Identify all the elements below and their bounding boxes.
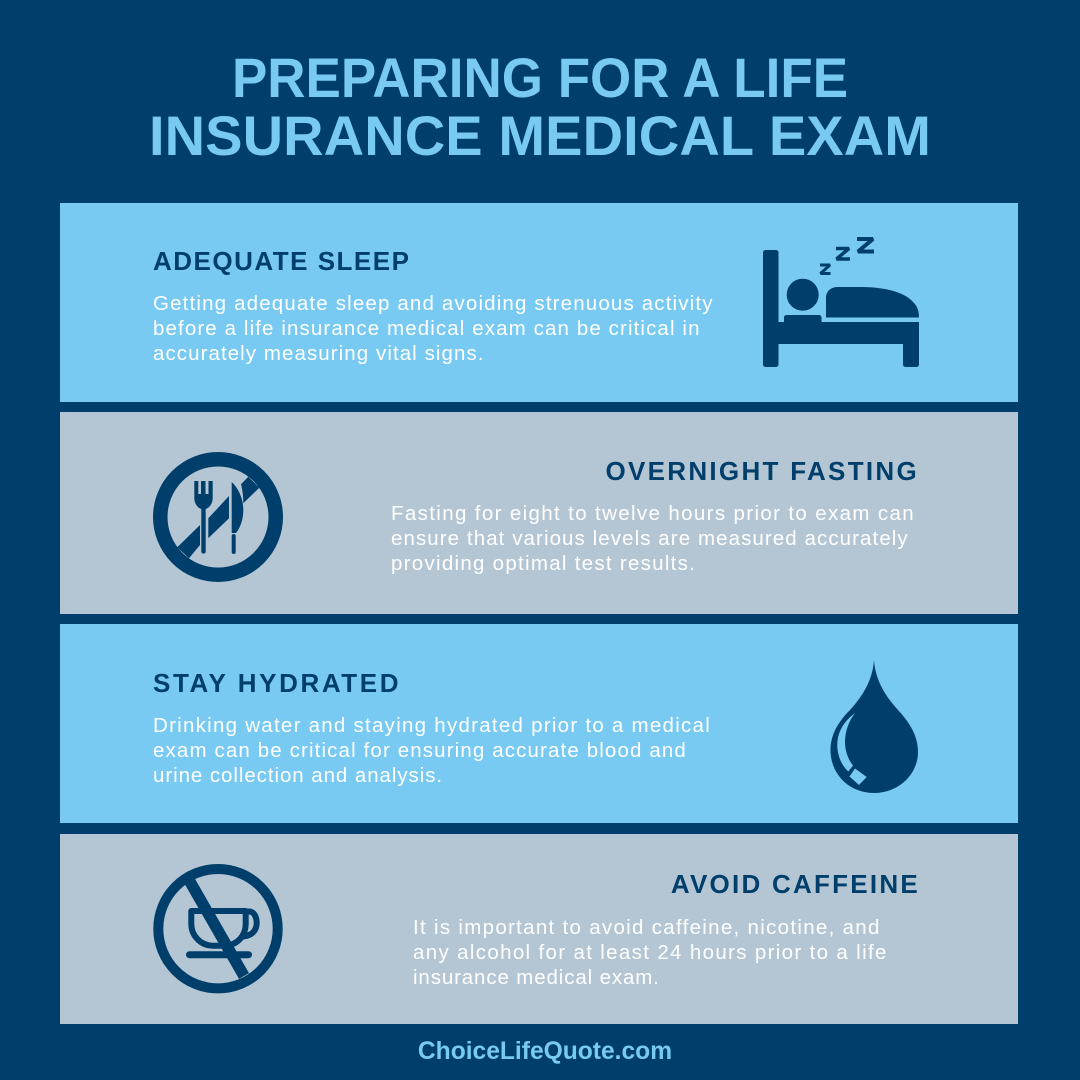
text: overnight fasting: ensure that various levels are measured accurately (391, 527, 909, 550)
heading: stay hydrated: STAY HYDRATED (153, 668, 401, 698)
text: adequate sleep: Getting adequate sleep and avoiding strenuous activity (153, 292, 714, 315)
footer website: ChoiceLifeQuote.com (418, 1038, 672, 1065)
text: adequate sleep (153, 292, 714, 365)
title (149, 46, 931, 167)
panel: adequate sleep (60, 203, 1018, 402)
text: stay hydrated (153, 714, 711, 787)
text: adequate sleep: before a life insurance medical exam can be critical in (153, 317, 701, 340)
heading: overnight fasting: OVERNIGHT FASTING (605, 456, 919, 486)
text: adequate sleep: accurately measuring vital signs. (153, 342, 485, 365)
text: stay hydrated: Drinking water and staying hydrated prior to a medical (153, 714, 711, 737)
icon: sleeping person in bed (763, 239, 919, 367)
text: overnight fasting: Fasting for eight to twelve hours prior to exam can (391, 502, 915, 525)
text: stay hydrated: exam can be critical for ensuring accurate blood and (153, 739, 687, 762)
panel: avoid caffeine (60, 834, 1018, 1024)
text: overnight fasting (391, 502, 915, 575)
icon: water drop (830, 660, 918, 793)
title: INSURANCE MEDICAL EXAM (149, 104, 931, 167)
panel: stay hydrated (60, 624, 1018, 823)
text: overnight fasting: providing optimal test results. (391, 552, 696, 575)
text: stay hydrated: urine collection and analysis. (153, 764, 443, 787)
text: avoid caffeine: any alcohol for at least 24 hours prior to a life (413, 941, 888, 964)
icon: no food (160, 459, 276, 575)
text: avoid caffeine (413, 916, 888, 989)
text: avoid caffeine: It is important to avoid caffeine, nicotine, and (413, 916, 881, 939)
text: avoid caffeine: insurance medical exam. (413, 966, 660, 989)
title: PREPARING FOR A LIFE (232, 46, 848, 109)
icon: no caffeine (158, 869, 278, 988)
heading: adequate sleep: ADEQUATE SLEEP (153, 246, 410, 276)
heading: avoid caffeine: AVOID CAFFEINE (671, 869, 920, 899)
panel: overnight fasting (60, 412, 1018, 614)
